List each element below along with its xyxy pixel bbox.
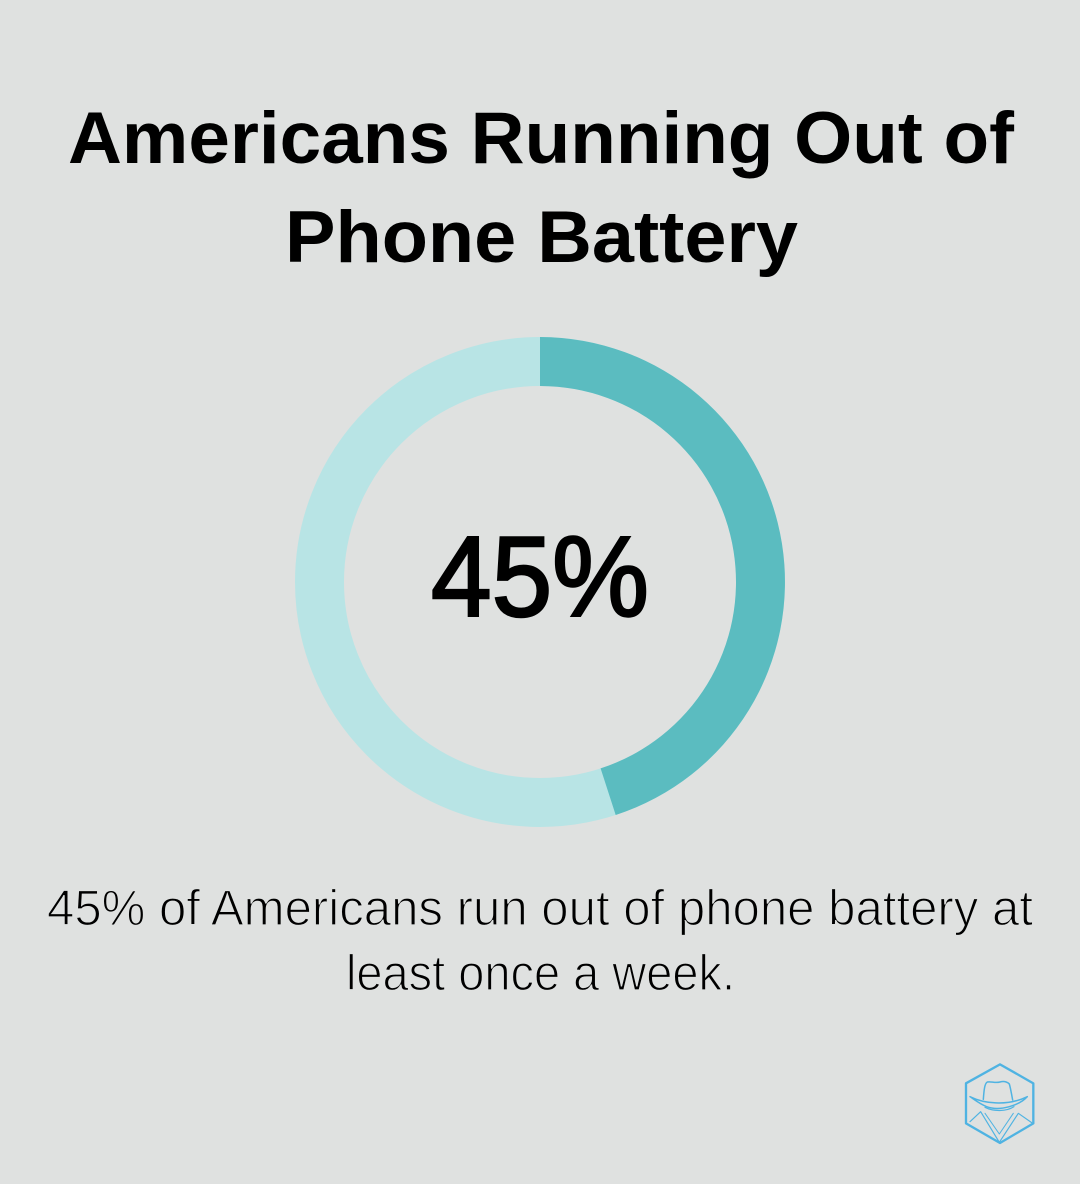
title: Phone Battery [285,197,798,278]
description text: 45% of Americans run out of phone battery at [47,880,1033,936]
donut chart: 45% [320,337,785,815]
title [68,98,1015,278]
description text [47,880,1033,1001]
description text: least once a week. [346,945,735,1001]
donut value: 45% [431,514,649,641]
title: Americans Running Out of [68,98,1015,179]
icon: hexagon logo with hat and coat [966,1064,1033,1143]
